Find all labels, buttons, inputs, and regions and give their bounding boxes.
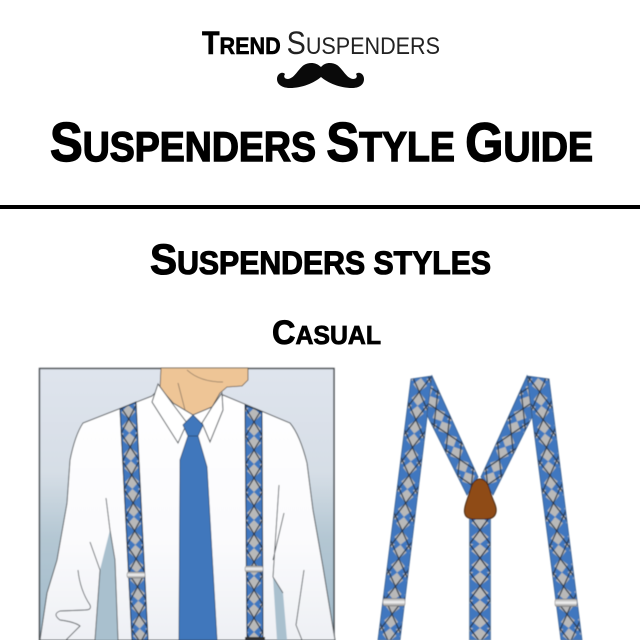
- left collar: [152, 384, 187, 443]
- suspender strap left: [120, 402, 148, 640]
- section heading: Suspenders styles: SUSPENDERS STYLES: [150, 236, 491, 284]
- left strap: [378, 376, 432, 640]
- suspender strap right: [245, 405, 263, 640]
- sub-heading: Casual: CASUAL: [272, 314, 381, 352]
- logo wordmark: TREND SUSPENDERS: [202, 25, 440, 61]
- right strap: [527, 376, 582, 640]
- right collar: [202, 393, 223, 442]
- neck: [160, 368, 248, 415]
- clip left: [383, 598, 405, 606]
- panel background: [40, 368, 334, 640]
- shirt gap left: [95, 530, 118, 640]
- neck crease lines: [178, 370, 223, 410]
- icon: moustache: [277, 63, 364, 88]
- tie knot: [183, 415, 203, 436]
- strap clip left: [127, 572, 145, 578]
- shirt fold lines: [56, 485, 304, 640]
- panel: man wearing suspenders: [40, 368, 335, 640]
- logo: Trend Suspenders: [202, 25, 440, 88]
- divider rule: [0, 205, 640, 209]
- illustration: Y-back suspenders: [378, 376, 582, 640]
- shirt gap right: [273, 577, 287, 640]
- left diagonal strap: [427, 376, 478, 495]
- leather patch: [464, 479, 496, 519]
- tie: [179, 436, 217, 640]
- center strap: [470, 516, 490, 640]
- strap clip right: [245, 566, 263, 572]
- title: SUSPENDERS STYLE GUIDE: [50, 111, 593, 173]
- shirt: [40, 388, 335, 640]
- strap clasp right: [245, 637, 265, 640]
- right diagonal strap: [481, 376, 532, 495]
- clip right: [555, 599, 577, 606]
